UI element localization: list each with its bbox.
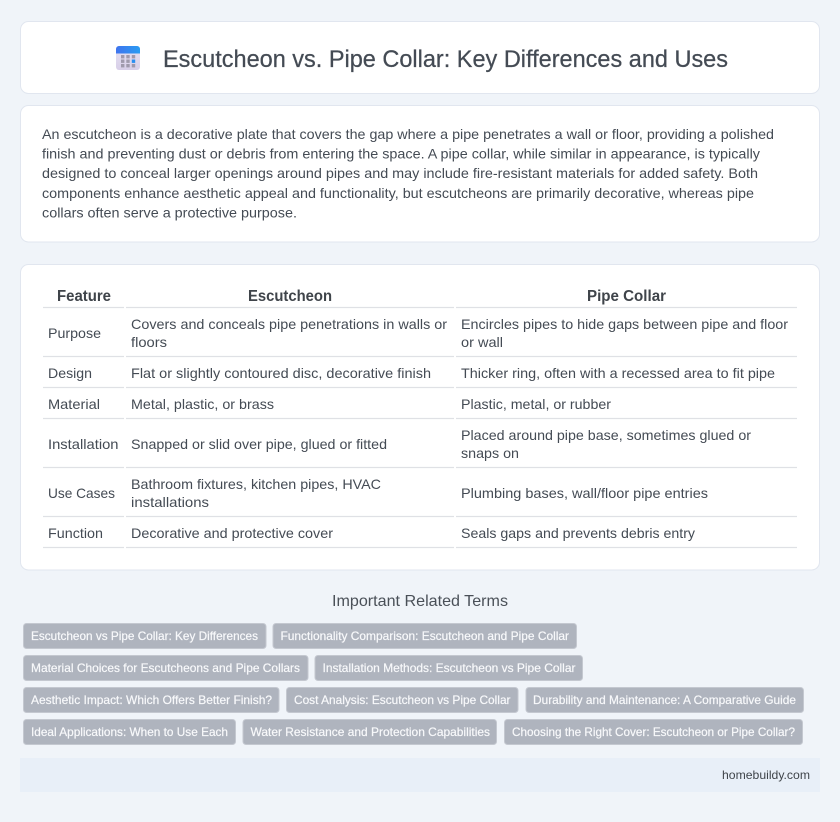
text block: introduction: An escutcheon is a decorative plate that covers the gap where a pipe penetrates a wall or floor, providing a polished (42, 126, 774, 142)
row: use cases: installations (131, 494, 209, 510)
table header: Feature (57, 288, 111, 305)
row: function (48, 525, 695, 541)
row: design: Flat or slightly contoured disc, decorative finish (131, 365, 431, 381)
tag (24, 656, 308, 680)
row: function: Function (48, 525, 103, 541)
footer source: homebuildy.com (722, 768, 810, 782)
related terms tags (24, 624, 804, 744)
row: use cases: Plumbing bases, wall/floor pipe entries (461, 485, 708, 501)
row: use cases (48, 476, 708, 510)
tag: Installation Methods: Escutcheon vs Pipe Collar (322, 661, 576, 675)
row: installation: Installation (48, 436, 118, 452)
tag (315, 656, 582, 680)
tag: Functionality Comparison: Escutcheon and Pipe Collar (280, 629, 569, 643)
icon: calendar (116, 46, 140, 70)
row: material: Metal, plastic, or brass (131, 396, 274, 412)
footer (20, 758, 820, 792)
panel: comparison table (20, 264, 820, 570)
tag: Durability and Maintenance: A Comparative Guide (533, 693, 796, 707)
tag: Water Resistance and Protection Capabilities (250, 725, 490, 739)
text block: introduction: finish and preventing dust or debris from entering the space. A pipe collar, while similar in appearance, is typically (42, 146, 760, 162)
row: use cases: Use Cases (48, 485, 115, 501)
table header (57, 288, 666, 305)
tag (526, 688, 804, 712)
tag (504, 720, 802, 744)
text block: introduction: collars often serve a protective purpose. (42, 204, 297, 220)
row: installation: snaps on (461, 445, 519, 461)
table header: Escutcheon (248, 288, 332, 305)
table header: Pipe Collar (587, 288, 666, 305)
tag (24, 624, 266, 648)
tag (24, 720, 236, 744)
row: material: Plastic, metal, or rubber (461, 396, 611, 412)
panel: header (20, 22, 820, 94)
heading: related terms: Important Related Terms (332, 593, 508, 610)
row: purpose: Covers and conceals pipe penetrations in walls or (131, 316, 447, 332)
row: use cases: Bathroom fixtures, kitchen pipes, HVAC (131, 476, 381, 492)
title: Escutcheon vs. Pipe Collar: Key Differences and Uses (163, 46, 728, 73)
row: function: Seals gaps and prevents debris entry (461, 525, 695, 541)
row: material: Material (48, 396, 100, 412)
row: installation (48, 427, 751, 461)
text block: introduction: components enhance aesthetic appeal and functionality, but escutcheons are primarily decorative, whereas pipe (42, 185, 754, 201)
tag: Ideal Applications: When to Use Each (31, 725, 228, 739)
row: purpose: Purpose (48, 325, 101, 341)
row: design: Design (48, 365, 92, 381)
row: installation: Placed around pipe base, sometimes glued or (461, 427, 751, 443)
tag: Aesthetic Impact: Which Offers Better Finish? (31, 693, 272, 707)
tag (243, 720, 496, 744)
row: installation: Snapped or slid over pipe, glued or fitted (131, 436, 387, 452)
tag (273, 624, 576, 648)
text block: introduction (42, 126, 774, 220)
row: design (48, 365, 775, 381)
row: purpose: or wall (461, 334, 503, 350)
row: purpose: Encircles pipes to hide gaps between pipe and floor (461, 316, 788, 332)
tag: Cost Analysis: Escutcheon vs Pipe Collar (294, 693, 511, 707)
tag: Escutcheon vs Pipe Collar: Key Differences (31, 629, 258, 643)
text block: introduction: designed to conceal larger openings around pipes and may include fire-resistant materials for added safety. Both (42, 165, 758, 181)
row: purpose (48, 316, 788, 350)
tag (24, 688, 279, 712)
tag (286, 688, 518, 712)
tag: Material Choices for Escutcheons and Pipe Collars (31, 661, 300, 675)
tag: Choosing the Right Cover: Escutcheon or Pipe Collar? (512, 725, 795, 739)
row: design: Thicker ring, often with a recessed area to fit pipe (461, 365, 775, 381)
panel: introduction (20, 106, 820, 242)
row: material (48, 396, 611, 412)
row: purpose: floors (131, 334, 167, 350)
row: function: Decorative and protective cover (131, 525, 333, 541)
